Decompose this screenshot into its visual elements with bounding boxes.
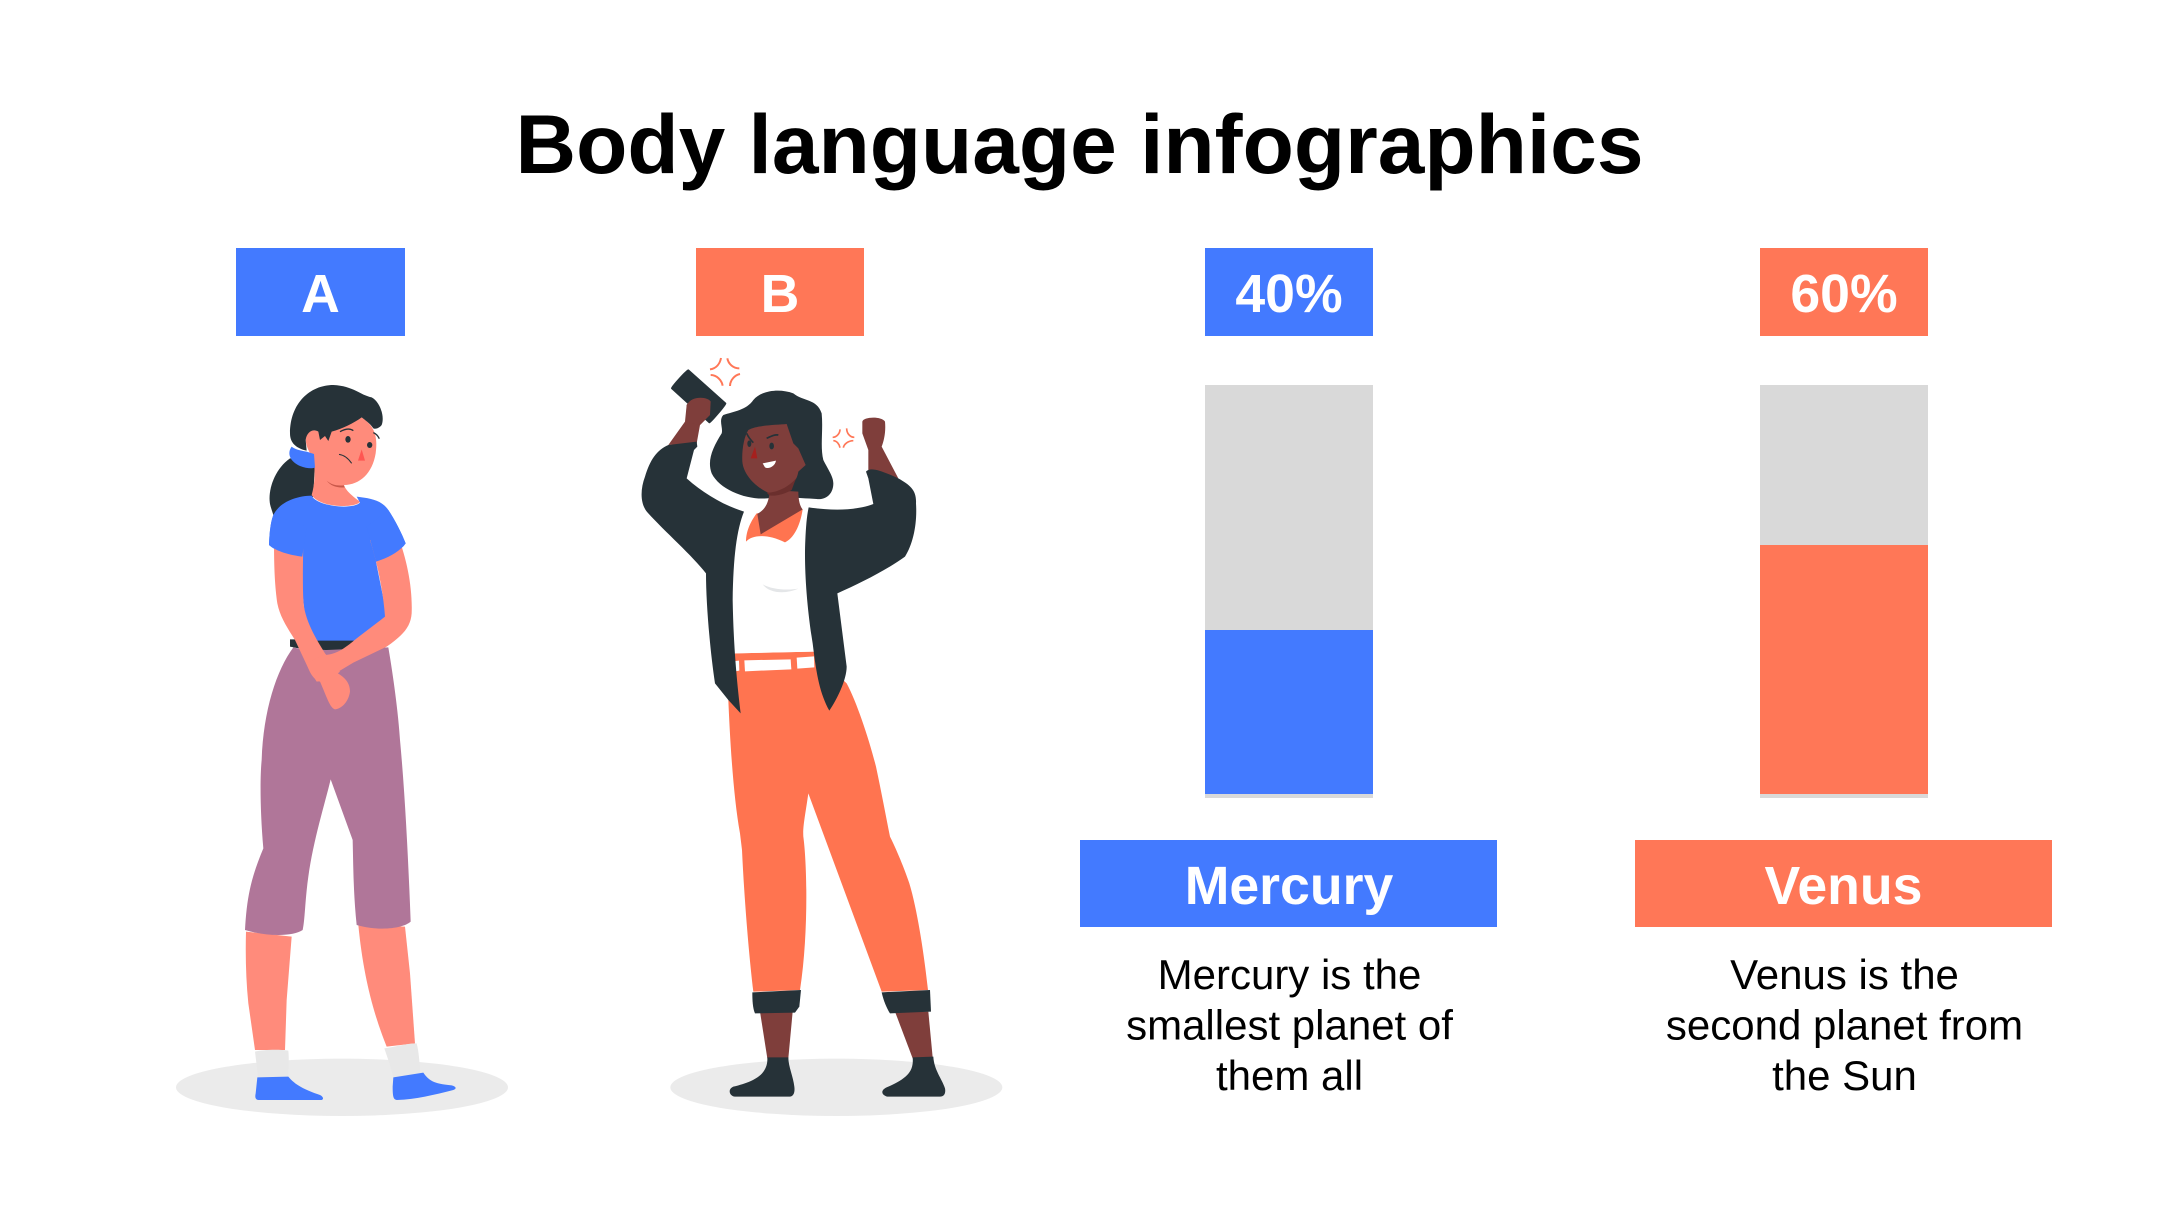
badge: B	[696, 248, 864, 336]
illustration: anxious woman A	[176, 385, 508, 1116]
anger mark: right	[833, 428, 854, 448]
face	[742, 424, 806, 493]
text: Mercury description: smallest planet of	[1126, 1002, 1453, 1048]
raised forearms	[668, 398, 898, 478]
label: Mercury	[1080, 840, 1497, 927]
ponytail	[270, 458, 315, 515]
white blouse	[733, 508, 813, 653]
chin shadow	[327, 481, 345, 487]
neck	[757, 490, 803, 534]
badge: 40%: 40%	[1235, 264, 1343, 324]
anger mark: top	[710, 358, 740, 386]
badge: A: A	[301, 264, 340, 324]
badge: A	[236, 248, 405, 336]
ankles	[760, 1012, 933, 1058]
orange collar	[746, 509, 803, 542]
neck and face	[306, 417, 376, 506]
socks	[730, 1057, 945, 1097]
text: Mercury description: them all	[1216, 1052, 1363, 1099]
trousers	[728, 652, 928, 992]
badge: 60%	[1760, 248, 1928, 336]
text: Venus description: the Sun	[1772, 1052, 1917, 1099]
ground shadow B	[670, 1059, 1002, 1116]
label: Venus	[1635, 840, 2052, 927]
t-shirt body	[269, 496, 406, 641]
illustration: angry woman B	[642, 358, 1002, 1116]
socks	[255, 1043, 421, 1079]
bar chart: Venus 60%	[1760, 385, 1928, 798]
ground shadow A	[176, 1059, 508, 1116]
label: Venus: Venus	[1765, 856, 1922, 916]
arms	[274, 537, 412, 709]
hair tie	[289, 447, 315, 468]
pants	[245, 647, 411, 935]
title: Body language infographics	[516, 97, 1643, 191]
face details	[747, 433, 778, 468]
t-shirt sleeves	[269, 510, 406, 562]
hair	[710, 391, 833, 499]
text: Mercury description: Mercury is the	[1158, 951, 1421, 998]
text: Venus description: second planet from	[1666, 1002, 2023, 1048]
label: Mercury: Mercury	[1185, 856, 1393, 916]
bar chart: Mercury 40%	[1205, 385, 1373, 798]
hand over phone	[686, 398, 711, 425]
under-chin shadow	[767, 478, 796, 496]
phone	[672, 370, 726, 423]
badge: 40%	[1205, 248, 1373, 336]
hair	[290, 385, 383, 451]
belt	[290, 639, 360, 651]
face details	[339, 429, 379, 463]
blouse fold	[763, 584, 798, 592]
trouser cuffs	[752, 990, 931, 1013]
jacket	[642, 442, 916, 713]
text: Venus description: Venus is the	[1730, 951, 1959, 998]
shoes	[255, 1073, 456, 1100]
badge: B: B	[761, 264, 799, 324]
belt	[735, 656, 814, 671]
badge: 60%: 60%	[1790, 264, 1898, 324]
legs	[246, 925, 415, 1050]
